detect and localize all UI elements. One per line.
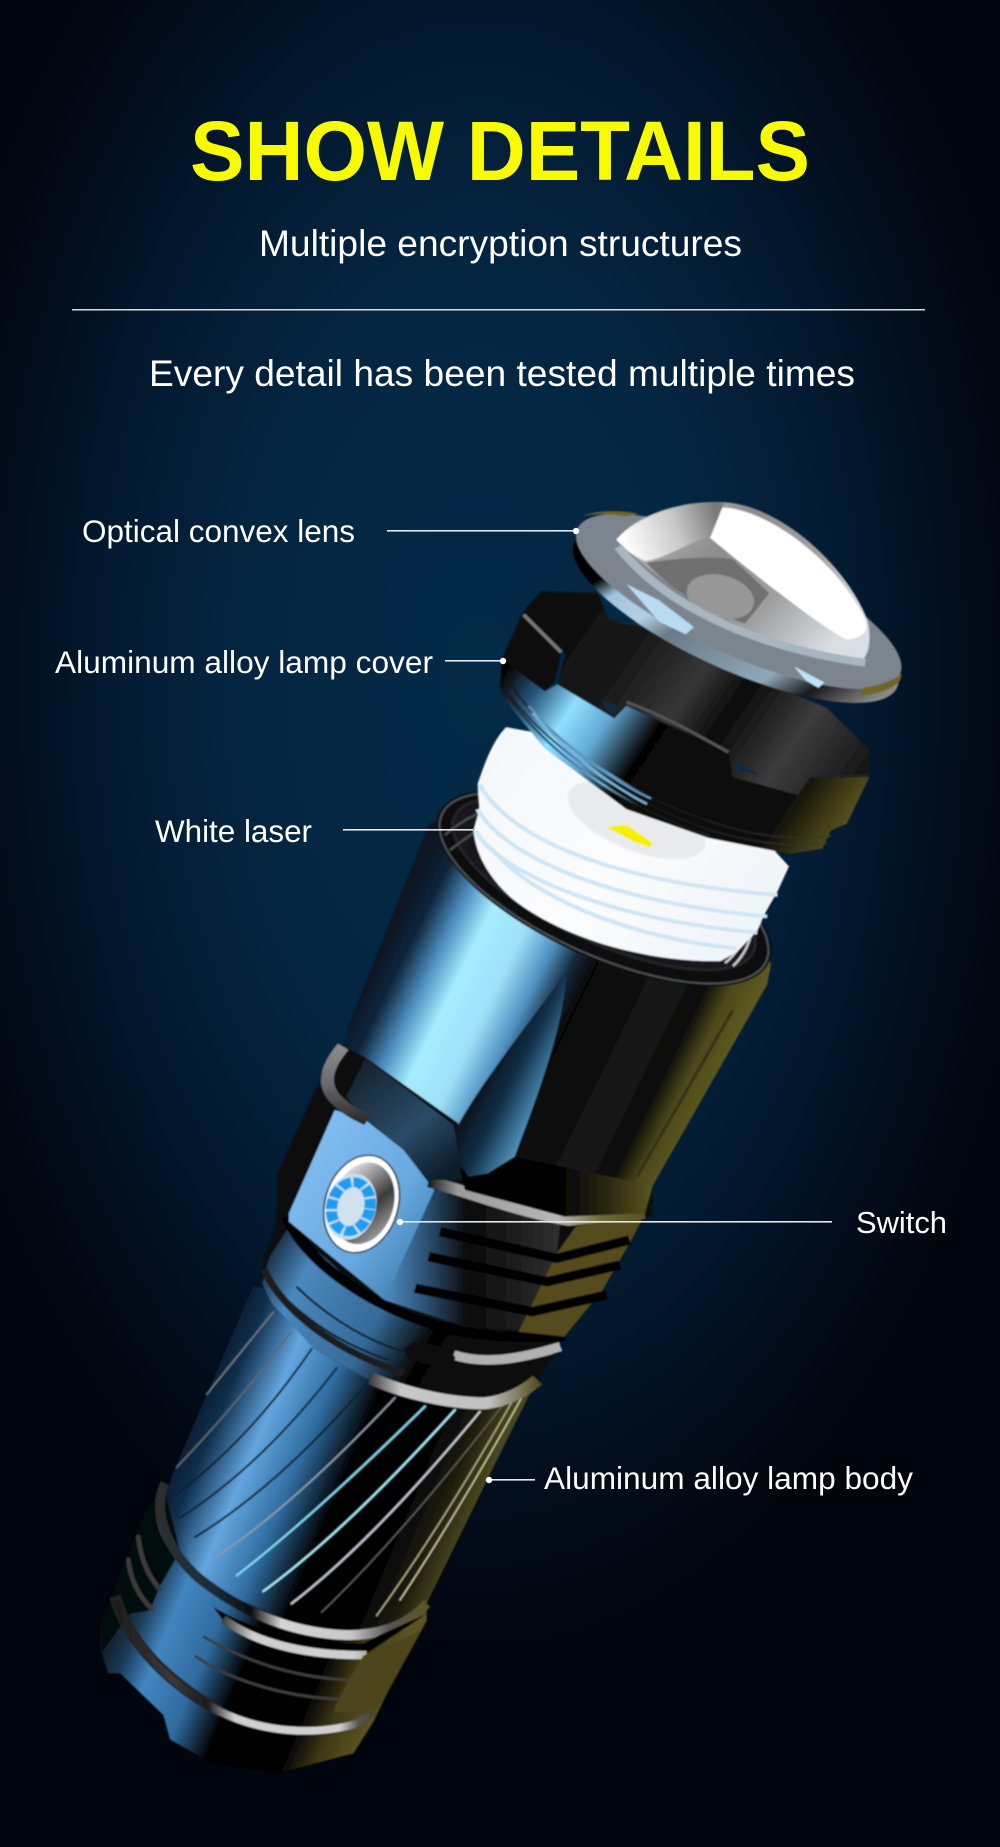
lower blue collar [262, 1227, 564, 1410]
tail ridged dark area [100, 1485, 180, 1652]
silver shoulder ring [429, 1182, 645, 1220]
button face [319, 1170, 382, 1243]
label: switch: Switch [856, 1205, 947, 1240]
flashlight illustration [100, 481, 927, 1773]
blue switch panel [289, 1110, 434, 1300]
grip slots [415, 1232, 629, 1312]
switch button [314, 1149, 409, 1259]
olive glint [859, 674, 902, 696]
crown interior [522, 591, 871, 795]
white highlight [710, 507, 867, 640]
dark collar [213, 1607, 427, 1656]
lamp cover [500, 591, 871, 854]
threads [504, 681, 831, 845]
switch section [262, 1045, 652, 1410]
ridged grip [385, 1190, 561, 1330]
black shoulder [459, 1157, 652, 1217]
divider [72, 309, 925, 310]
inner circle [679, 566, 761, 627]
barrel mouth rim [410, 749, 798, 1027]
knurled body [160, 1286, 540, 1638]
optical convex lens [547, 481, 927, 737]
label: optical convex lens [82, 513, 579, 549]
fin groove [456, 972, 566, 1177]
blue reflection [627, 584, 694, 634]
title: SHOW DETAILS [190, 104, 810, 198]
label: white laser: White laser [155, 813, 312, 849]
LED chip [606, 825, 652, 848]
left reflection [616, 502, 724, 561]
flange top [551, 481, 927, 722]
label: aluminum alloy lamp cover: Aluminum alloy lamp cover [55, 644, 433, 680]
olive edge line [637, 1010, 733, 1177]
tail grooves [195, 1637, 350, 1699]
subtitle: Multiple encryption structures [259, 223, 742, 264]
crown left wall [502, 613, 561, 691]
crown rim highlights [524, 615, 869, 777]
second ring [223, 1619, 367, 1655]
dark band [346, 1058, 465, 1180]
recessed face [554, 764, 720, 876]
flange edge [547, 493, 925, 737]
metal rim [323, 1157, 403, 1249]
barrel details [327, 972, 733, 1217]
blue segments [327, 1179, 375, 1234]
dome [616, 502, 869, 659]
left silver ring [327, 1047, 367, 1120]
olive side [519, 1213, 645, 1337]
tail cap [100, 1485, 427, 1773]
lower collar silver ring [371, 1378, 538, 1403]
white ring [314, 1149, 409, 1259]
section silhouette [262, 1045, 652, 1410]
outer band [500, 659, 869, 854]
crown gaps [600, 621, 761, 775]
lower ring shadow [115, 1596, 220, 1712]
thread ridges [476, 784, 778, 949]
lower ring [117, 1600, 375, 1731]
lamp body and tail [100, 1286, 540, 1773]
label: switch [397, 1205, 947, 1240]
inner shadow [647, 558, 769, 624]
spiral grooves [175, 1312, 522, 1616]
collar lines [264, 1217, 564, 1373]
olive side [333, 1631, 420, 1715]
tagline: Every detail has been tested multiple times [149, 353, 855, 394]
white laser module [473, 727, 789, 961]
glass rim [618, 547, 865, 663]
label: aluminum alloy lamp body: Aluminum alloy lamp body [544, 1460, 913, 1496]
label: optical convex lens: Optical convex lens [82, 513, 355, 549]
head barrel [327, 790, 771, 1217]
upper tail ring [160, 1483, 427, 1635]
tail ridge lines [128, 1495, 168, 1609]
collar notch [404, 1342, 455, 1370]
internal threads [445, 812, 752, 966]
